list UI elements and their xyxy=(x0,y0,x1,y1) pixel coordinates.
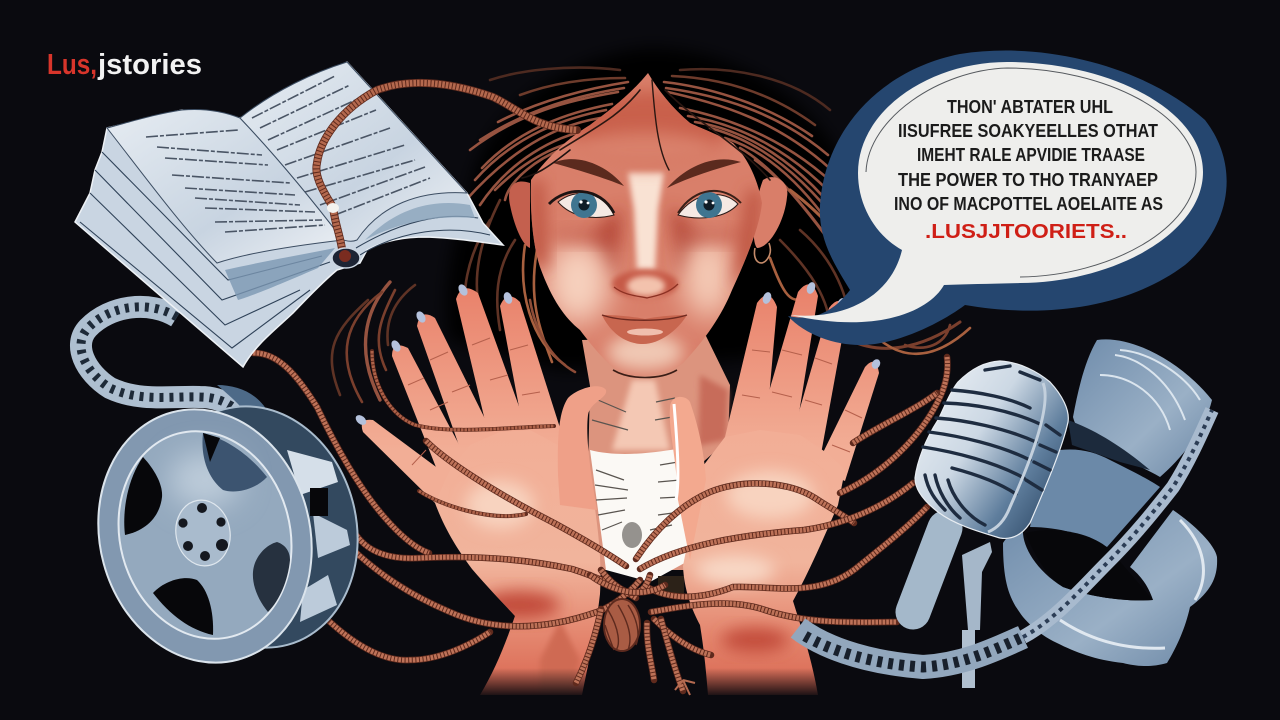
left palm shading xyxy=(466,481,580,695)
right finger joints xyxy=(742,350,862,452)
reel back drum xyxy=(128,383,384,671)
lower film strip xyxy=(798,410,1212,667)
reel openings xyxy=(124,433,290,635)
open book xyxy=(75,62,577,367)
bubble white body xyxy=(790,62,1203,322)
bubble text: INO OF MACPOTTEL AOELAITE AS xyxy=(894,194,1163,214)
book left page xyxy=(107,109,343,263)
film reel xyxy=(70,383,384,687)
microphone xyxy=(913,361,1068,688)
right thumb xyxy=(670,397,706,560)
left finger joints xyxy=(408,338,540,465)
right palm shading xyxy=(695,471,814,652)
rope through the book xyxy=(316,83,577,268)
left thumb xyxy=(558,386,606,510)
bubble text: THON' ABTATER UHL xyxy=(947,97,1113,117)
rope tails xyxy=(576,609,695,695)
left fingers xyxy=(362,288,567,503)
book page stack xyxy=(75,62,503,367)
left palm and wrist xyxy=(435,430,601,695)
mic head xyxy=(915,361,1068,538)
bubble text: THE POWER TO THO TRANYAEP xyxy=(898,170,1158,190)
ropes around the wrists xyxy=(253,351,947,695)
bubble text xyxy=(894,97,1163,243)
mic grille xyxy=(923,366,1060,525)
film strip to reel xyxy=(81,307,275,437)
reel front rim xyxy=(70,385,340,687)
bubble blue backing xyxy=(788,51,1227,345)
bubble text: .LUSJJTOORIETS.. xyxy=(925,221,1127,243)
logo xyxy=(47,49,202,81)
ribbon upper loop xyxy=(1073,339,1212,477)
rope knot xyxy=(590,570,665,651)
chin line xyxy=(613,370,677,378)
book text lines xyxy=(146,76,430,232)
right eye xyxy=(678,191,741,218)
bubble text: IISUFREE SOAKYEELLES OTHAT xyxy=(898,121,1158,141)
white chest xyxy=(590,448,690,582)
ears and earring xyxy=(509,177,787,263)
left nail tips xyxy=(354,283,514,427)
book right page xyxy=(240,62,467,241)
right nail tips xyxy=(761,281,882,370)
ribbon middle band xyxy=(1030,449,1160,547)
nose xyxy=(612,270,678,298)
ribbon lower loop xyxy=(1003,510,1217,666)
logo: jstories xyxy=(97,49,202,81)
right fingers xyxy=(725,284,879,481)
reel fins xyxy=(287,450,350,622)
face shading xyxy=(530,91,762,370)
right palm and wrist xyxy=(683,430,845,695)
eyebrows xyxy=(553,159,741,188)
left hand xyxy=(354,283,606,695)
speech bubble xyxy=(788,51,1227,345)
forehead strands xyxy=(522,80,770,180)
film ribbon xyxy=(1003,339,1217,666)
reel inner plate xyxy=(96,412,314,658)
reel hub xyxy=(171,496,235,570)
mic stand xyxy=(962,542,992,688)
logo: Lus, xyxy=(47,49,97,81)
bubble text: IMEHT RALE APVIDIE TRAASE xyxy=(917,145,1145,165)
left eye xyxy=(549,191,614,218)
mic handle xyxy=(913,528,945,612)
lips xyxy=(602,315,687,344)
face xyxy=(530,73,762,378)
hair: dark mass and strands xyxy=(332,48,970,402)
right hand xyxy=(670,281,882,695)
neck and shoulders xyxy=(582,336,730,596)
wrist fade xyxy=(470,668,830,698)
